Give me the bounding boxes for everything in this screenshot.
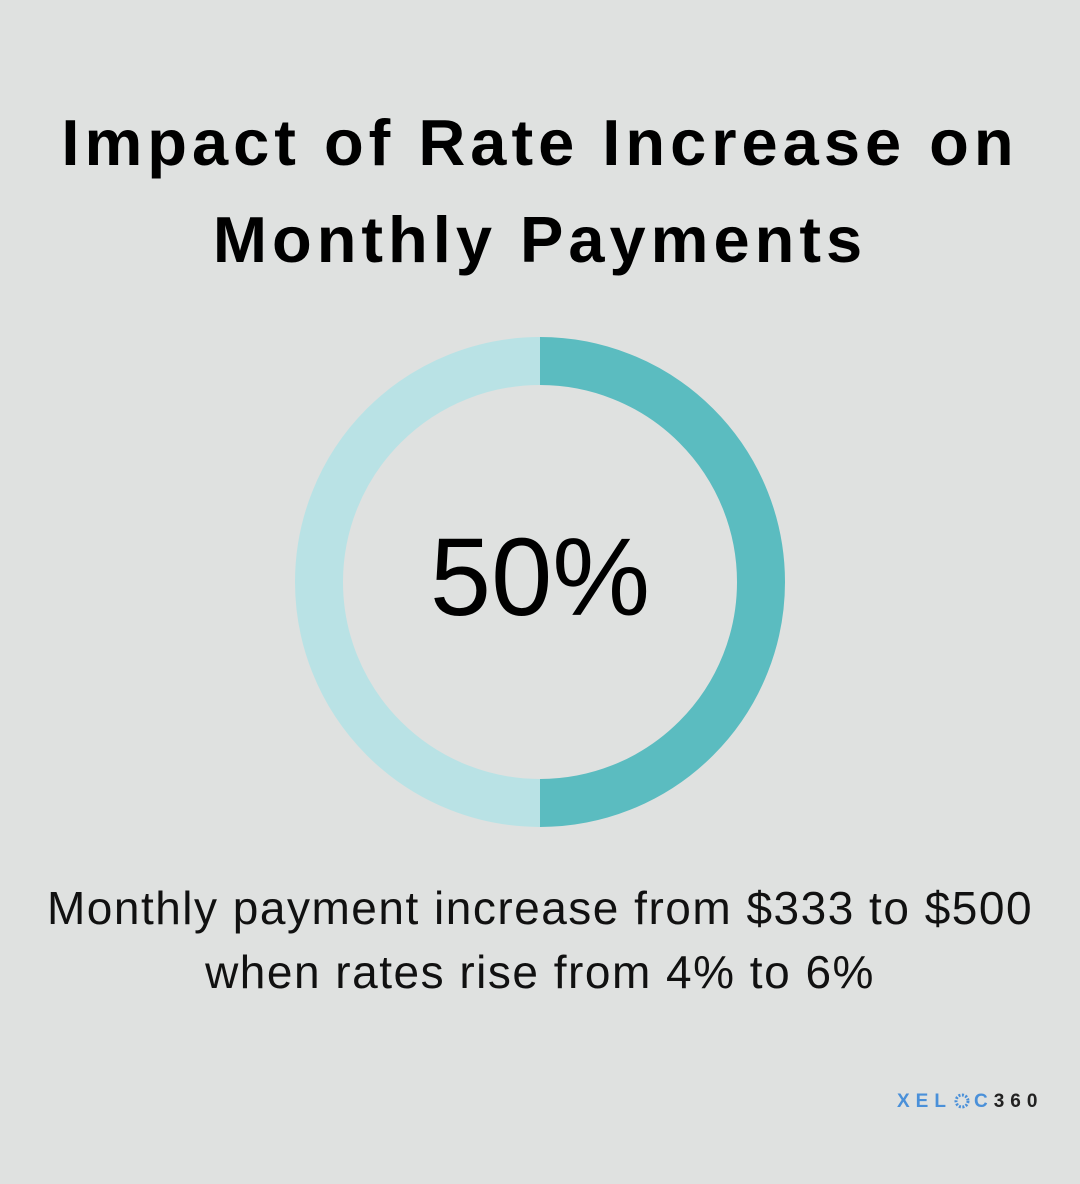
caption: when rates rise from 4% to 6% bbox=[205, 946, 875, 998]
title: Monthly Payments bbox=[213, 203, 867, 276]
ring background bbox=[319, 361, 540, 803]
percentage label: 50% bbox=[430, 516, 650, 639]
caption bbox=[47, 882, 1033, 998]
caption: Monthly payment increase from $333 to $500 bbox=[47, 882, 1033, 934]
logo: XEL C360 bbox=[897, 1091, 1043, 1112]
title: Impact of Rate Increase on bbox=[61, 106, 1019, 179]
title bbox=[61, 106, 1019, 276]
ring value 50% bbox=[540, 361, 761, 803]
